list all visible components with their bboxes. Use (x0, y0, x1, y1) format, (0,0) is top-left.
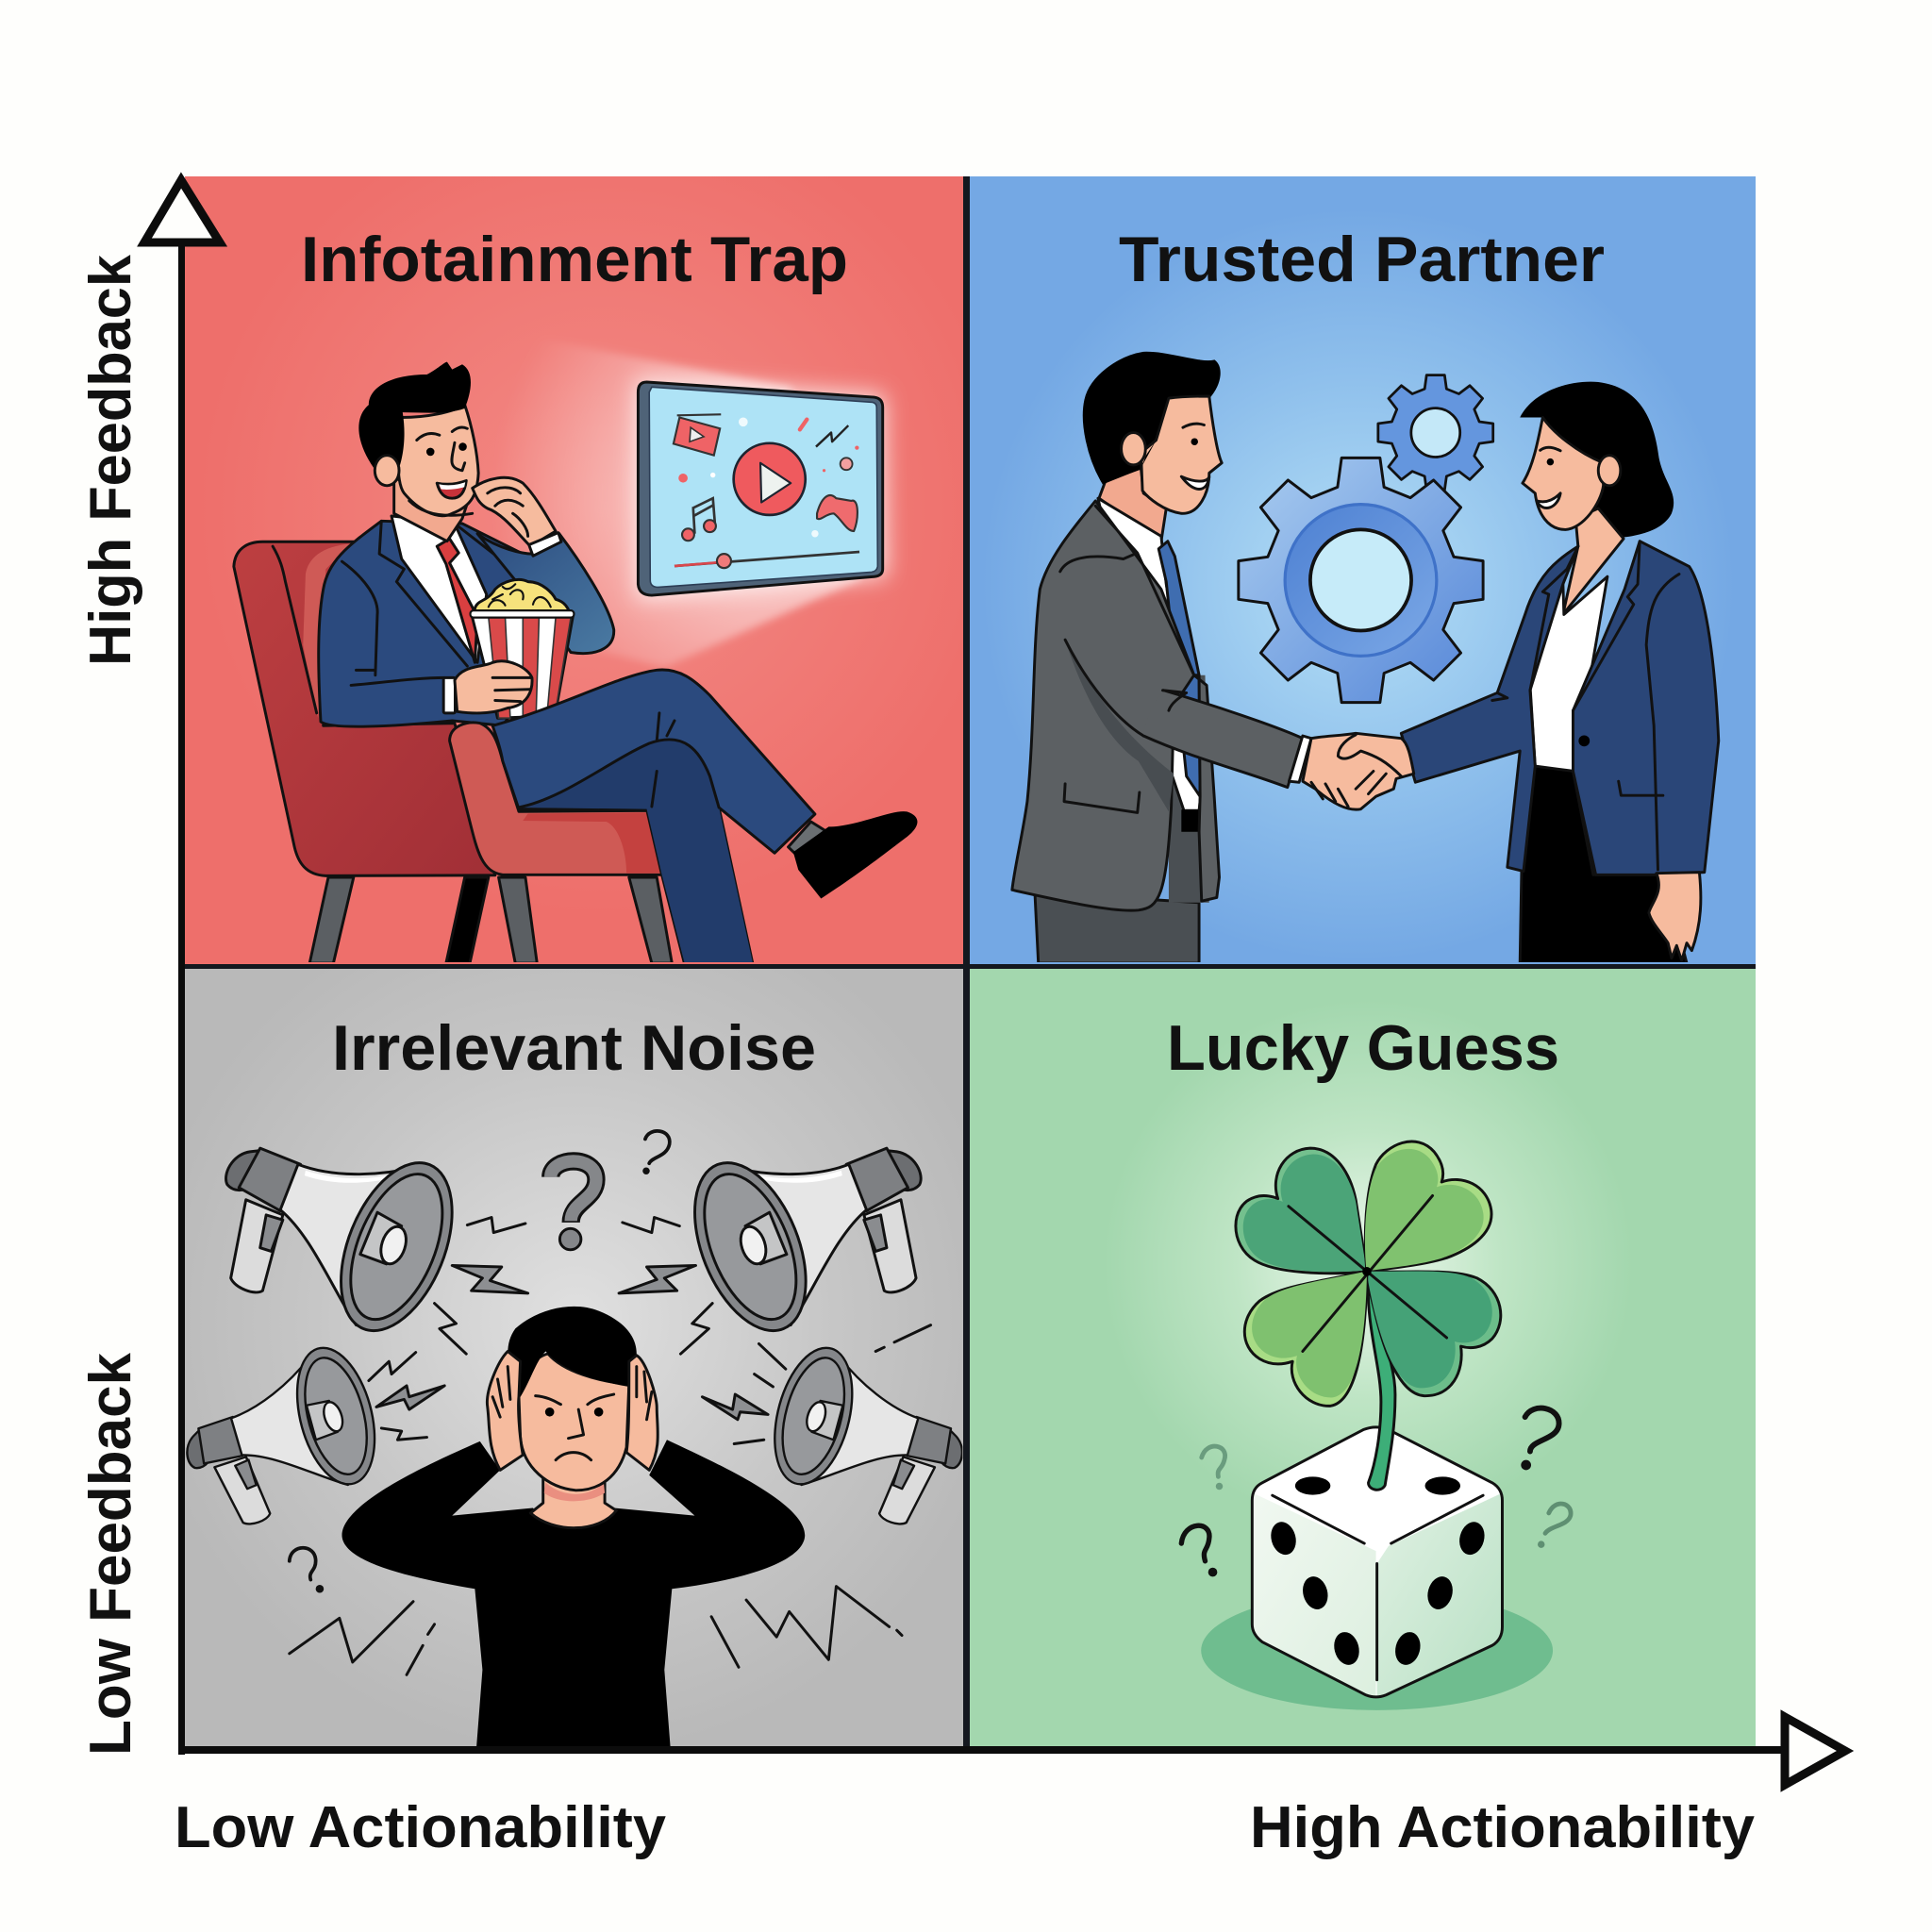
axis label: Low Feedback: Low Feedback (78, 1352, 143, 1756)
progress slider (675, 552, 859, 568)
icon: large gear (1239, 458, 1483, 703)
icon: game controller (817, 495, 858, 531)
noise bolts and scribbles (290, 1218, 931, 1674)
heading: Lucky Guess: Lucky Guess (1167, 1012, 1559, 1084)
armchair back and seat (234, 541, 672, 963)
handshake (1303, 733, 1414, 809)
man: crossed legs in navy trousers (492, 670, 815, 964)
panel: Irrelevant Noise (low feedback, low actionability) (176, 968, 974, 1748)
man: hand holding bucket and cuff (351, 661, 532, 713)
person covering ears (341, 1307, 805, 1748)
panel: Lucky Guess (low feedback, high actionability) (970, 968, 1756, 1747)
icon: four-leaf clover (1236, 1141, 1501, 1406)
panel: Infotainment Trap (high feedback, low actionability) (185, 176, 963, 965)
icon: megaphone bottom left (176, 1318, 432, 1566)
illustration: person covering ears surrounded by megaphones (176, 1131, 974, 1748)
axis label: High Actionability: High Actionability (1250, 1795, 1756, 1860)
icon: video clip (674, 414, 721, 456)
man: hand eating popcorn (473, 477, 561, 556)
illustration: handshake with gears (1012, 353, 1719, 963)
axis label: Low Actionability: Low Actionability (175, 1795, 667, 1860)
ground shadow (1201, 1591, 1553, 1710)
screen glow (637, 379, 887, 599)
light beam from screen (517, 347, 862, 668)
icon: play button (734, 443, 806, 515)
chair front arm (450, 723, 663, 874)
man in grey suit (1012, 353, 1311, 963)
icon: megaphone top left (226, 1147, 475, 1347)
popcorn bucket (471, 579, 574, 718)
woman in navy blazer (1401, 382, 1719, 963)
heading: Trusted Partner: Trusted Partner (1119, 224, 1605, 295)
panel: Trusted Partner (high feedback, high actionability) (970, 176, 1756, 965)
icon: megaphone bottom right (718, 1318, 974, 1566)
question marks (290, 1131, 670, 1593)
axis: vertical feedback arrow (144, 180, 220, 1755)
divider lines between quadrants (185, 176, 1756, 1747)
axis: horizontal actionability arrow (178, 1717, 1845, 1785)
icon: music notes (682, 498, 716, 541)
illustration: man watching screen with popcorn (234, 331, 917, 964)
icon: megaphone top right (673, 1147, 921, 1347)
man: head (358, 362, 478, 541)
icon: die (1252, 1427, 1502, 1697)
heading: Irrelevant Noise: Irrelevant Noise (332, 1012, 816, 1084)
question marks (1181, 1408, 1571, 1576)
heading: Infotainment Trap: Infotainment Trap (301, 224, 848, 295)
icon: small gear (1378, 375, 1493, 490)
axis label: High Feedback: High Feedback (78, 254, 143, 666)
man: jacket and torso (319, 516, 614, 726)
icon: video screen (638, 382, 883, 595)
icon: clover stem (1368, 1278, 1395, 1490)
screen confetti dots (678, 417, 859, 537)
illustration: four-leaf clover on a die (1181, 1141, 1571, 1710)
man: sock and shoe (789, 811, 917, 898)
